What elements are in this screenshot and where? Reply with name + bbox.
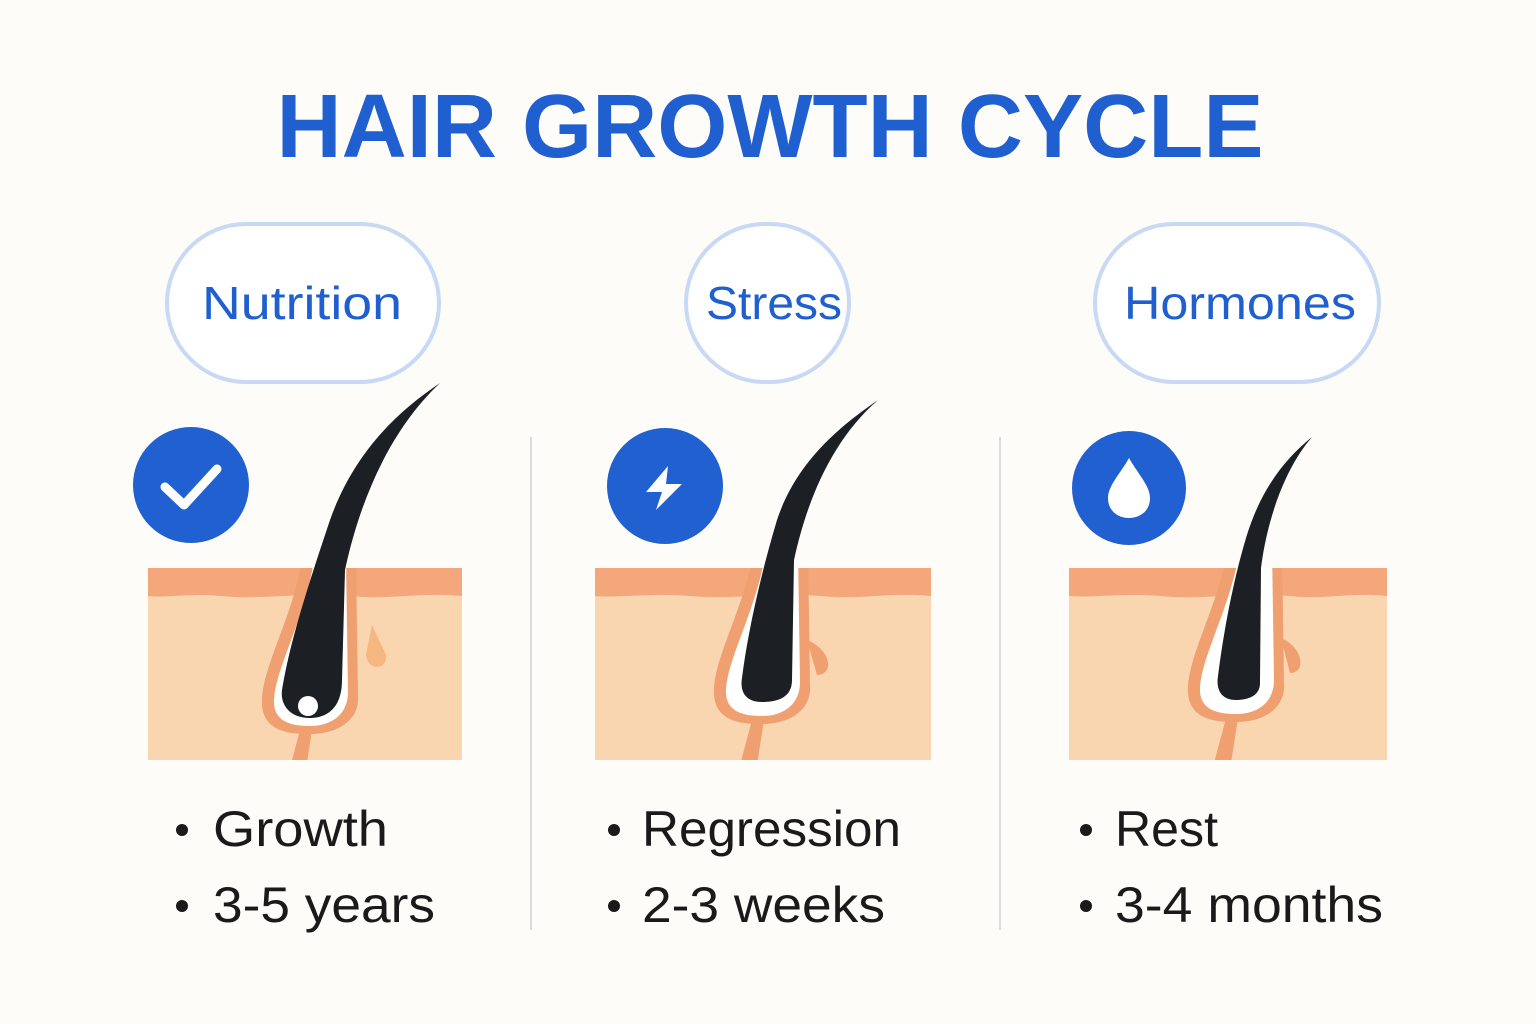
text: rest: Rest <box>1115 801 1218 857</box>
icon: water drop <box>1072 431 1186 545</box>
skin illustration: rest <box>1069 437 1387 763</box>
pill: Nutrition <box>167 224 439 382</box>
pill: Hormones: Hormones <box>1124 277 1356 329</box>
text: growth <box>176 801 435 933</box>
title: HAIR GROWTH CYCLE <box>276 77 1264 177</box>
skin illustration: growth <box>148 383 462 775</box>
pill: Stress: Stress <box>706 277 842 329</box>
pill: Nutrition: Nutrition <box>202 277 402 329</box>
pill: Hormones <box>1095 224 1379 382</box>
pill: Stress <box>686 224 849 382</box>
icon: check <box>133 427 249 543</box>
text: regression: 2-3 weeks <box>642 877 885 933</box>
text: rest: 3-4 months <box>1115 877 1383 933</box>
icon: lightning <box>607 428 723 544</box>
skin illustration: regression <box>595 400 931 765</box>
text: regression: Regression <box>642 801 901 857</box>
text: regression <box>608 801 901 933</box>
text: growth: 3-5 years <box>213 877 435 933</box>
text: rest <box>1080 801 1383 933</box>
text: growth: Growth <box>213 801 388 857</box>
